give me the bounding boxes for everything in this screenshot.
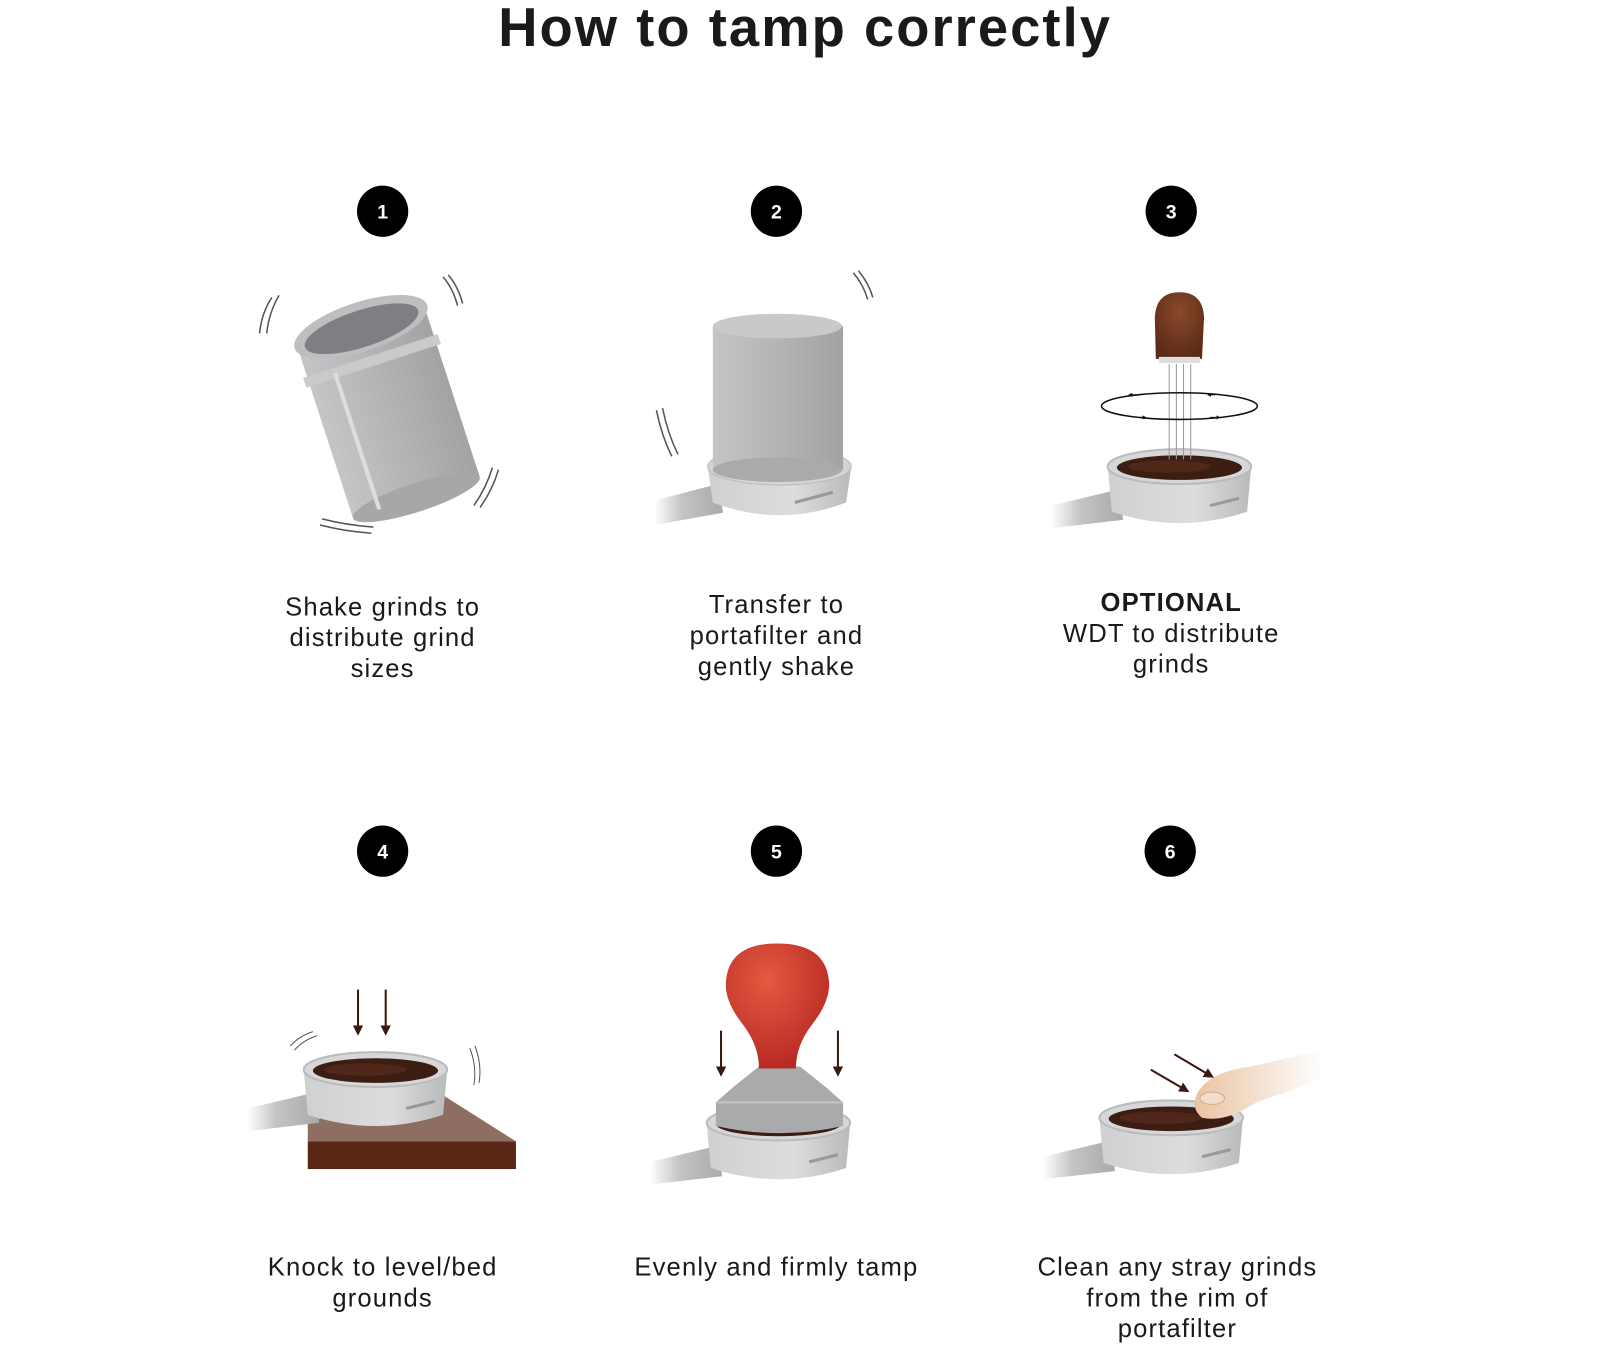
caption 4: Knock to level/bed (268, 1254, 497, 1282)
caption 6: Clean any stray grinds (1037, 1254, 1317, 1282)
badge 5: 5 (771, 841, 782, 863)
badge 6: 6 (1165, 841, 1176, 863)
badge 4 (357, 826, 408, 877)
step 4: grounds (332, 1284, 433, 1312)
step 1: distribute grind (290, 624, 476, 652)
badge 3 (1146, 186, 1197, 237)
step 4 (247, 826, 516, 1312)
caption 5: Evenly and firmly tamp (634, 1254, 918, 1282)
step 1: sizes (351, 655, 415, 683)
step 1 (260, 186, 499, 683)
caption 3: OPTIONAL (1101, 589, 1242, 617)
badge 1: 1 (377, 201, 388, 223)
step 6: from the rim of (1086, 1284, 1268, 1312)
icon: WDT tool over portafilter (1051, 292, 1257, 528)
icon: finger cleaning rim (1043, 1051, 1323, 1179)
step 2: portafilter and (690, 622, 863, 650)
step 6 (1037, 826, 1323, 1343)
icon: tilted cylinder shaker (286, 282, 488, 533)
icon: knock block with portafilter (247, 990, 516, 1169)
step 3: grinds (1133, 651, 1210, 679)
step 2: gently shake (698, 653, 855, 681)
badge 2 (751, 186, 802, 237)
step 6: portafilter (1118, 1315, 1237, 1343)
badge 4: 4 (377, 841, 388, 863)
caption 2: Transfer to (709, 591, 844, 619)
icon: portafilter with dosing cup (654, 314, 851, 525)
step 5 (634, 826, 918, 1282)
step 3 (1051, 186, 1280, 679)
badge 2: 2 (771, 201, 782, 223)
caption 1: Shake grinds to (285, 593, 480, 621)
step 2 (654, 186, 873, 681)
badge 3: 3 (1166, 201, 1177, 223)
icon: tamper in portafilter (650, 943, 850, 1184)
step 3: WDT to distribute (1063, 620, 1280, 648)
motion lines (260, 275, 499, 533)
badge 1 (357, 186, 408, 237)
badge 5 (751, 826, 802, 877)
badge 6 (1145, 826, 1196, 877)
